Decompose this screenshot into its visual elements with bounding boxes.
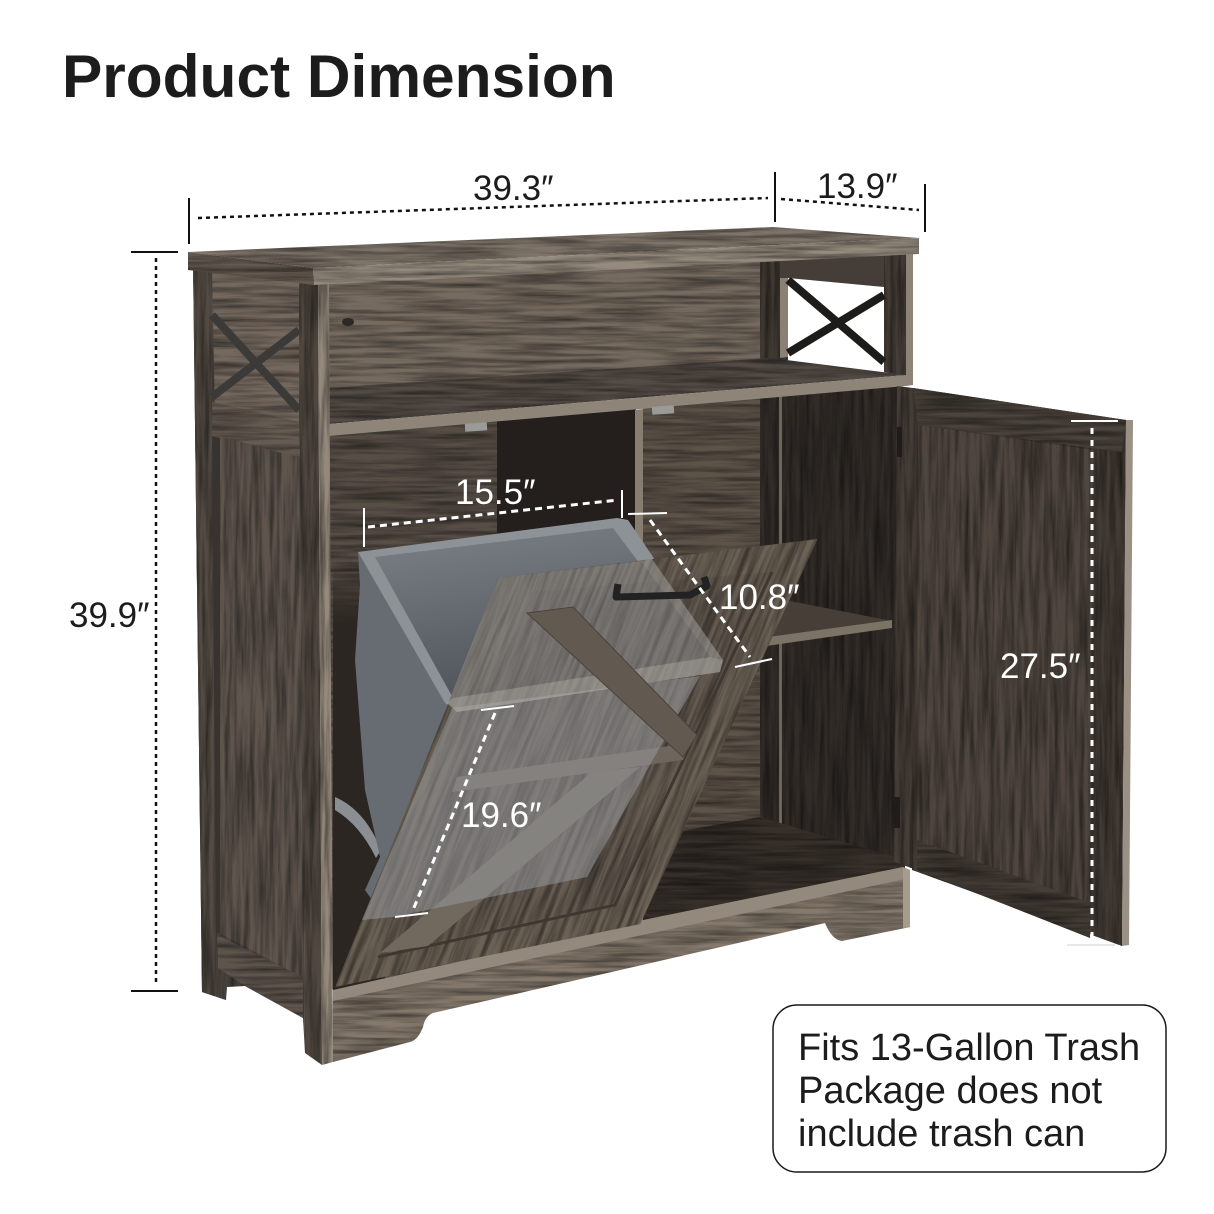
open right door — [894, 386, 1133, 946]
dimension: can depth 10.8: 10.8″ — [719, 578, 800, 617]
cabinet — [188, 227, 1133, 1065]
dimension: width 39.3 — [189, 169, 768, 244]
callout: trash can note: include trash can — [798, 1113, 1085, 1155]
interior shelf — [710, 601, 892, 654]
dimension: can height 19.6 — [395, 706, 542, 917]
lower interior — [329, 384, 905, 990]
left side X brace — [212, 315, 299, 410]
dimension: can width 15.5: 15.5″ — [455, 473, 536, 512]
left side panel — [193, 262, 305, 1053]
can interior — [375, 528, 710, 698]
door diagonal bar — [527, 607, 697, 757]
metal X brace, right — [788, 280, 884, 362]
can body — [355, 552, 460, 900]
tilted door — [335, 539, 818, 987]
door lower and middle bars — [380, 743, 690, 953]
mechanism arm — [335, 797, 381, 858]
trash can — [335, 518, 723, 900]
shelf hinge brackets — [465, 405, 674, 432]
door hinges — [894, 427, 902, 828]
dimension: width 39.3: 39.3″ — [473, 169, 554, 208]
interior floor — [643, 817, 905, 922]
top board — [188, 227, 919, 285]
left front post — [299, 278, 333, 1065]
callout: trash can note: Fits 13-Gallon Trash — [798, 1027, 1140, 1069]
door handle — [616, 577, 707, 597]
upper back panel — [329, 258, 762, 392]
right upper frame with open X section — [760, 250, 913, 386]
dimension: door height 27.5: 27.5″ — [1000, 647, 1081, 686]
center divider — [635, 409, 643, 923]
door inner panel — [378, 572, 772, 954]
middle open shelf — [329, 358, 906, 436]
door frame — [335, 539, 818, 987]
callout: trash can note — [773, 1005, 1166, 1172]
knots on upper panel — [342, 318, 354, 457]
dimension: height 39.9: 39.9″ — [69, 596, 150, 635]
left compartment back — [329, 420, 497, 990]
dimension: can depth 10.8 — [628, 513, 800, 667]
dimension: depth 13.9: 13.9″ — [817, 167, 898, 206]
callout: trash can note: Package does not — [798, 1070, 1103, 1112]
right compartment back — [643, 392, 762, 840]
title: Product Dimension — [62, 42, 616, 110]
dimension: can height 19.6: 19.6″ — [461, 796, 542, 835]
door inner frame lines — [378, 572, 772, 957]
can rim — [358, 518, 723, 712]
dimension: depth 13.9 — [775, 167, 925, 232]
can seen through door — [362, 559, 723, 920]
dimension: can width 15.5 — [364, 473, 622, 547]
plinth base — [333, 867, 910, 1062]
